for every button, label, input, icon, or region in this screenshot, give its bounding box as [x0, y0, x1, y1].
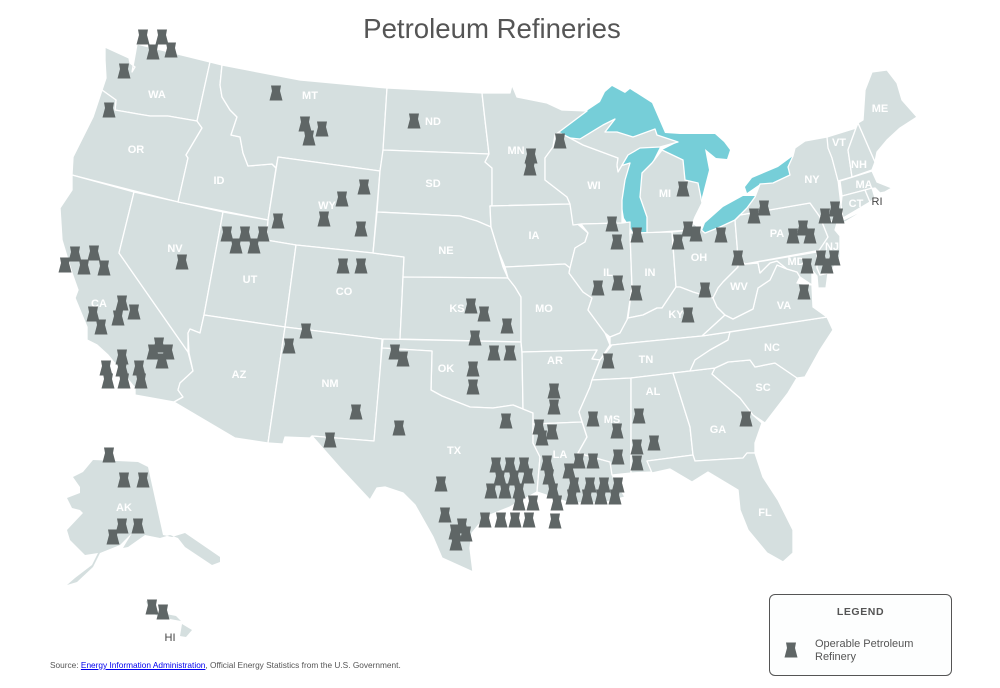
- great lakes: [558, 86, 793, 236]
- state: Washington: [102, 44, 210, 121]
- state: New Hampshire: [848, 123, 875, 177]
- title: Petroleum Refineries: [363, 13, 621, 44]
- state labels: KY: [668, 309, 684, 321]
- state labels: WV: [730, 281, 749, 293]
- state shapes: [60, 44, 917, 637]
- state labels: WI: [587, 180, 601, 192]
- state: Michigan upper: [570, 119, 678, 172]
- state: Nevada: [119, 192, 223, 352]
- state: Louisiana: [533, 422, 625, 503]
- state labels: AR: [547, 355, 563, 367]
- refineries: alaska: [102, 448, 150, 544]
- state labels: MD: [787, 256, 805, 268]
- state: Missouri: [505, 264, 610, 360]
- state labels: NM: [321, 378, 339, 390]
- lake ontario: [745, 156, 793, 193]
- state: Alaska: [67, 460, 220, 585]
- state labels: NJ: [825, 241, 839, 253]
- state: Montana: [220, 65, 387, 171]
- state: Ohio: [672, 220, 738, 298]
- source note: Source: Energy Information Administration, Official Energy Statistics from the U.S. Government.: [50, 660, 401, 670]
- refineries: south central: [388, 298, 614, 446]
- state: Florida: [647, 453, 793, 562]
- state labels: SD: [425, 178, 441, 190]
- state: Kentucky: [610, 287, 725, 345]
- state labels: VT: [832, 137, 846, 149]
- state: Idaho: [178, 62, 276, 220]
- state: Nebraska: [373, 212, 508, 278]
- state labels: MT: [302, 90, 318, 102]
- state: Michigan lower: [640, 150, 702, 233]
- state labels: IA: [528, 230, 540, 242]
- state labels: OR: [128, 144, 144, 156]
- state labels: MN: [507, 145, 525, 157]
- lake superior and huron: [558, 86, 730, 203]
- state: Delaware: [817, 250, 828, 275]
- state: Massachusetts: [840, 171, 892, 196]
- state labels: SC: [755, 382, 771, 394]
- state labels: OH: [691, 252, 707, 264]
- legend heading: LEGEND: [837, 606, 884, 618]
- state labels: NE: [438, 245, 454, 257]
- state: North Carolina: [690, 317, 833, 378]
- state labels: ME: [872, 103, 888, 115]
- refineries: northwest: [102, 30, 178, 118]
- state: South Dakota: [377, 150, 492, 227]
- state: Oklahoma: [382, 339, 523, 409]
- legend text: [815, 638, 913, 662]
- state: Connecticut: [841, 190, 870, 218]
- state labels: [91, 89, 888, 644]
- state: Alabama: [631, 373, 693, 473]
- state: Maryland: [745, 252, 828, 288]
- state labels: RI: [872, 196, 882, 208]
- state labels: PA: [770, 228, 784, 240]
- lake erie: [700, 196, 757, 236]
- state labels: AZ: [232, 369, 247, 381]
- state: Hawaii: [146, 601, 192, 637]
- state labels: ND: [425, 116, 441, 128]
- state: Kansas: [400, 277, 521, 342]
- refineries: gulf coast: [434, 408, 660, 550]
- state labels: GA: [710, 424, 726, 436]
- state labels: CO: [336, 286, 353, 298]
- state: West Virginia: [713, 257, 787, 319]
- state labels: NH: [851, 159, 867, 171]
- state labels: MA: [855, 179, 873, 191]
- state labels: NY: [804, 174, 820, 186]
- state: Iowa: [490, 204, 588, 268]
- state: Illinois: [569, 222, 632, 337]
- state: Wisconsin: [545, 133, 630, 225]
- state: Arkansas: [522, 350, 600, 424]
- state: Oregon: [72, 90, 202, 202]
- legend text: Refinery: [815, 650, 856, 662]
- legend text: Operable Petroleum: [815, 638, 913, 650]
- state: Vermont: [827, 128, 856, 181]
- state: Indiana: [628, 232, 676, 318]
- state: Georgia: [673, 368, 762, 461]
- state labels: ID: [214, 175, 225, 187]
- state labels: TN: [639, 354, 653, 366]
- state: South Carolina: [712, 360, 797, 423]
- state: California: [60, 175, 193, 402]
- state labels: MO: [535, 303, 553, 315]
- state: Tennessee: [592, 332, 730, 380]
- state: Texas: [312, 348, 540, 572]
- state labels: MS: [604, 414, 620, 426]
- state: Utah: [204, 212, 296, 327]
- state labels: TX: [447, 445, 462, 457]
- state: Maine: [858, 70, 917, 162]
- state labels: CA: [91, 298, 107, 310]
- state labels: FL: [758, 507, 772, 519]
- state: New Mexico: [268, 327, 382, 444]
- state labels: IL: [603, 267, 613, 279]
- state labels: NV: [167, 243, 183, 255]
- legend: [769, 594, 952, 676]
- state labels: WA: [148, 89, 166, 101]
- state: North Dakota: [383, 88, 489, 154]
- lake michigan: [616, 147, 660, 235]
- state labels: IN: [644, 267, 656, 279]
- state: Minnesota: [482, 85, 587, 206]
- refineries: california: [58, 246, 174, 388]
- state: Mississippi: [578, 378, 631, 475]
- refineries: hawaii: [146, 600, 170, 620]
- state labels: OK: [438, 363, 454, 375]
- state: Wyoming: [266, 157, 380, 253]
- icon: refinery: [784, 642, 798, 658]
- state: Colorado: [285, 245, 404, 340]
- state: Rhode Island: [865, 188, 875, 202]
- state labels: LA: [553, 449, 567, 461]
- state labels: UT: [243, 274, 258, 286]
- state labels: CT: [849, 198, 864, 210]
- state: New Jersey: [818, 217, 840, 273]
- state labels: AK: [116, 502, 132, 514]
- state: Virginia: [702, 265, 827, 336]
- state: New York: [735, 137, 870, 223]
- refineries: midwest: [408, 114, 744, 322]
- state labels: VA: [777, 300, 791, 312]
- state labels: AL: [646, 386, 661, 398]
- state: Arizona: [174, 315, 285, 443]
- state: Pennsylvania: [735, 203, 828, 264]
- refinery markers: [58, 30, 844, 620]
- refineries: rockies: [176, 86, 370, 448]
- refineries: northeast: [748, 200, 844, 300]
- state labels: WY: [318, 200, 337, 212]
- refineries: southeast: [740, 412, 752, 426]
- state labels: NC: [764, 342, 780, 354]
- state labels: KS: [449, 303, 465, 315]
- state labels: HI: [164, 632, 176, 644]
- state labels: MI: [659, 188, 671, 200]
